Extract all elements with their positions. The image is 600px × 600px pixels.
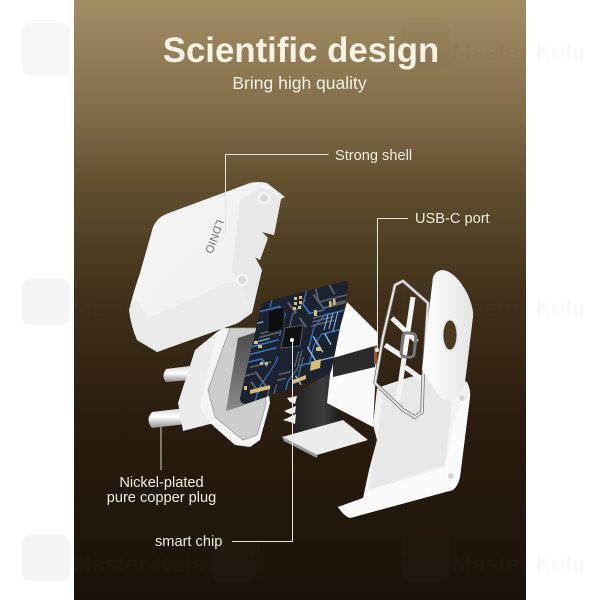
callout: nickel-plated plug: pure copper plug — [107, 490, 216, 506]
blue traces — [248, 291, 344, 401]
callout: smart chip: smart chip — [155, 534, 222, 550]
dark core — [293, 372, 343, 434]
gray traces — [245, 284, 347, 397]
subtitle: Bring high quality — [232, 73, 367, 93]
callout: nickel-plated plug — [107, 427, 216, 506]
internal transformer block — [282, 302, 378, 458]
bottom plate — [282, 420, 368, 455]
background panel — [74, 0, 526, 600]
plate rim and interior — [208, 328, 266, 440]
title: Scientific design — [163, 31, 439, 70]
white casing — [327, 302, 378, 427]
watermarks: Master Kola — [452, 39, 586, 65]
white crossbars — [385, 297, 423, 400]
plug plate — [200, 328, 270, 447]
callout: nickel-plated plug: Nickel-plated — [119, 475, 204, 491]
screw post — [237, 275, 247, 285]
gold pads — [244, 296, 336, 394]
secondary chip — [268, 307, 285, 333]
watermarks: Master Kola — [72, 295, 206, 321]
screw post — [259, 193, 269, 203]
top shell — [129, 182, 285, 352]
watermarks: Master Kola — [452, 295, 586, 321]
main chip — [281, 325, 303, 348]
plug pins — [148, 366, 190, 428]
brand logo: LDNIO — [202, 218, 225, 255]
USB-C opening — [443, 320, 457, 350]
plug body — [178, 332, 262, 431]
watermarks: Master Kola — [72, 551, 206, 577]
callout: strong shell — [223, 148, 412, 239]
watermarks: Master Kola — [452, 551, 586, 577]
callout: strong shell: Strong shell — [335, 148, 412, 164]
callout: smart chip — [155, 338, 294, 550]
circuit board — [240, 280, 348, 404]
callout: USB-C port: USB-C port — [415, 211, 490, 227]
metal frame — [375, 281, 428, 417]
front cover — [422, 270, 473, 401]
charger base shell — [338, 372, 470, 518]
plug — [148, 328, 270, 447]
callout: USB-C port — [375, 211, 490, 352]
